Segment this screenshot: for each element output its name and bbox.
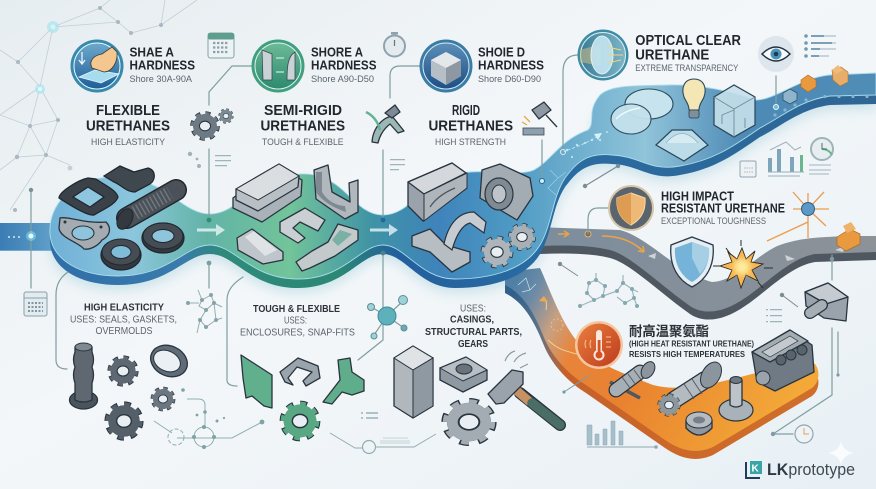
callout: rigid uses: CASINGS, xyxy=(450,314,494,326)
heading: high heat xyxy=(629,323,754,359)
icon: calendar xyxy=(208,33,234,58)
icon: hammer and plate xyxy=(522,102,557,135)
part: bearing housing xyxy=(480,164,533,220)
heading: Shore A hardness: Shore 30A-90A xyxy=(130,74,193,85)
heading: optical clear xyxy=(635,33,741,73)
soft shadow under the flow band xyxy=(50,87,876,293)
heading: Shore A to D xyxy=(311,44,377,85)
logo: LKprototype: LKprototype xyxy=(767,460,855,479)
icon: thermometer xyxy=(575,321,623,369)
connector lines xyxy=(56,55,840,436)
clear parts: lenses xyxy=(611,89,673,134)
part: plate xyxy=(241,355,272,408)
heading: optical clear: URETHANE xyxy=(635,47,710,63)
icon: shield badge xyxy=(608,185,654,231)
heading: semi-rigid urethanes: URETHANES xyxy=(260,118,345,134)
icon: stopwatch xyxy=(384,32,405,56)
heading: flexible urethanes xyxy=(86,103,170,148)
green sample parts xyxy=(241,355,364,437)
callout: semi-rigid uses: USES: xyxy=(284,316,307,326)
icon: list xyxy=(766,309,782,322)
icon: force diagram xyxy=(767,192,829,241)
heading: rigid urethanes: RIGID xyxy=(452,103,480,119)
heading: high impact: EXCEPTIONAL TOUGHNESS xyxy=(661,216,766,226)
mini chart and timer xyxy=(740,138,833,177)
callout: rigid uses: STRUCTURAL PARTS, xyxy=(425,326,522,338)
icon: lens xyxy=(578,30,628,80)
heading: Shore D: Shore D60-D90 xyxy=(478,74,541,85)
part: flange xyxy=(719,376,753,421)
logo: LKprototype: K xyxy=(752,464,760,474)
icon: list xyxy=(390,159,405,170)
heading: Shore A hardness xyxy=(130,44,195,85)
part: nut xyxy=(686,412,712,435)
panel: high heat resistant urethane xyxy=(575,273,848,449)
orange crate xyxy=(837,222,860,251)
part: gears and ring xyxy=(108,339,193,437)
part: clamp bracket xyxy=(412,212,486,272)
icon: small list and line xyxy=(330,413,436,454)
part: machined block xyxy=(408,163,467,221)
heading: optical clear: EXTREME TRANSPARENCY xyxy=(635,63,738,73)
molecule diagram xyxy=(578,273,639,308)
part: C clip xyxy=(280,358,320,386)
callout: flexible uses: OVERMOLDS xyxy=(96,326,153,337)
part: gears xyxy=(484,226,533,265)
molecule: left xyxy=(186,290,222,333)
heading: flexible urethanes: URETHANES xyxy=(86,118,170,134)
part: clip xyxy=(280,208,325,243)
explosion burst xyxy=(713,240,773,288)
part: stepped post xyxy=(70,343,98,409)
heading: high impact: HIGH IMPACT xyxy=(661,190,734,204)
big shield xyxy=(671,237,713,287)
callout: rigid uses: GEARS xyxy=(458,338,488,350)
part: small block xyxy=(237,229,283,264)
heading: semi-rigid urethanes xyxy=(260,103,345,148)
heading: flexible urethanes: FLEXIBLE xyxy=(96,103,160,119)
panel: rigid header xyxy=(420,40,544,148)
part: ring 2 xyxy=(142,223,184,253)
panel: semi-rigid header xyxy=(252,40,377,148)
part: housing xyxy=(233,164,302,222)
panel: flexible urethanes header xyxy=(70,40,195,148)
molecule: star xyxy=(368,296,408,339)
panel: optical clear urethane xyxy=(578,30,869,177)
heading: rigid urethanes: HIGH STRENGTH xyxy=(435,137,506,148)
part: gray gasket xyxy=(59,218,109,249)
heading: Shore A to D: HARDNESS xyxy=(311,58,377,72)
part: hammer xyxy=(488,351,560,425)
icon: calendar lower left xyxy=(24,292,47,316)
heading: Shore D: SHOIE D xyxy=(478,44,525,60)
part: big gear xyxy=(447,403,491,441)
heading: semi-rigid urethanes: TOUGH & FLEXIBLE xyxy=(262,137,344,148)
part: engine block xyxy=(752,330,814,391)
callout: semi-rigid uses: TOUGH & FLEXIBLE xyxy=(253,304,340,315)
heading: high impact xyxy=(661,190,785,226)
conveyor details xyxy=(773,65,869,117)
part: notched block xyxy=(440,357,487,392)
part: tall block xyxy=(394,346,433,418)
callout: semi-rigid uses: ENCLOSURES, SNAP-FITS xyxy=(240,328,355,338)
clear parts: cube xyxy=(714,85,755,137)
part: U-bracket xyxy=(314,165,358,219)
icon: cube xyxy=(420,40,472,92)
icon: hardness comparison xyxy=(252,40,304,92)
callout: semi-rigid uses xyxy=(240,304,355,338)
part: wrench xyxy=(296,224,358,271)
callout: flexible uses: HIGH ELASTICITY xyxy=(84,303,164,314)
decorative network, top left xyxy=(0,0,197,212)
part: shaft 2 xyxy=(660,358,726,414)
part: dark bracket xyxy=(104,166,154,192)
heading: Shore A to D: SHORE A xyxy=(311,44,364,60)
orange branch: high heat xyxy=(505,268,818,459)
heading: flexible urethanes: HIGH ELASTICITY xyxy=(91,137,166,148)
icon: gears, header 1 xyxy=(193,110,232,138)
gray branch: high impact xyxy=(535,227,876,320)
clear parts: light bulb xyxy=(683,79,705,118)
callout: flexible uses xyxy=(70,303,177,337)
input band at left xyxy=(0,188,56,288)
heading: Shore A hardness: HARDNESS xyxy=(130,58,195,72)
logo: LKprototype xyxy=(746,441,855,479)
part: textured grip xyxy=(114,190,176,232)
callout: rigid uses xyxy=(425,304,522,350)
icon: dots and list xyxy=(188,152,231,168)
icon: clock xyxy=(795,425,813,443)
rigid sample parts xyxy=(394,346,560,441)
part: shaft 1 xyxy=(610,359,658,398)
icon: eye xyxy=(758,36,794,72)
part: black diamond gasket xyxy=(59,178,118,215)
flow arrows between stages xyxy=(197,224,398,236)
heading: high heat: RESISTS HIGH TEMPERATURES xyxy=(629,349,745,359)
part: camera-like casting xyxy=(805,283,848,321)
icon: hand pressing soft block xyxy=(70,40,124,92)
panel: high impact resistant urethane xyxy=(608,185,860,288)
semi-rigid parts on band xyxy=(233,164,358,271)
main flow: flexible, semi-rigid, rigid, optical xyxy=(50,73,876,288)
callout: flexible uses: USES: SEALS, GASKETS, xyxy=(70,314,177,326)
icon: bent part xyxy=(366,105,404,143)
heading: Shore A to D: Shore A90-D50 xyxy=(311,74,374,85)
icon: data list xyxy=(804,34,836,58)
heading: high heat: (HIGH HEAT RESISTANT URETHANE) xyxy=(629,339,754,349)
circuit decoration xyxy=(154,388,264,449)
part: bracket xyxy=(323,358,364,404)
bar chart xyxy=(587,421,658,449)
heading: semi-rigid urethanes: SEMI-RIGID xyxy=(264,103,342,119)
heading: Shore D: HARDNESS xyxy=(478,58,544,72)
flexible sample parts xyxy=(70,339,193,437)
part: ring 1 xyxy=(101,239,141,270)
heading: Shore A hardness: SHAE A xyxy=(130,44,175,60)
rigid parts on band xyxy=(408,163,533,272)
heading: high impact: RESISTANT URETHANE xyxy=(661,202,785,216)
clear parts: dome xyxy=(656,130,708,161)
part: green gear xyxy=(284,405,316,437)
heading: Shore D xyxy=(478,44,544,85)
flexible parts on band xyxy=(59,166,184,270)
heading: rigid urethanes: URETHANES xyxy=(428,118,513,134)
heading: optical clear: OPTICAL CLEAR xyxy=(635,33,741,49)
heading: rigid urethanes xyxy=(428,103,513,148)
callout: rigid uses: USES: xyxy=(460,304,486,315)
heading: high heat: 耐高温聚氨酯 xyxy=(629,323,709,339)
